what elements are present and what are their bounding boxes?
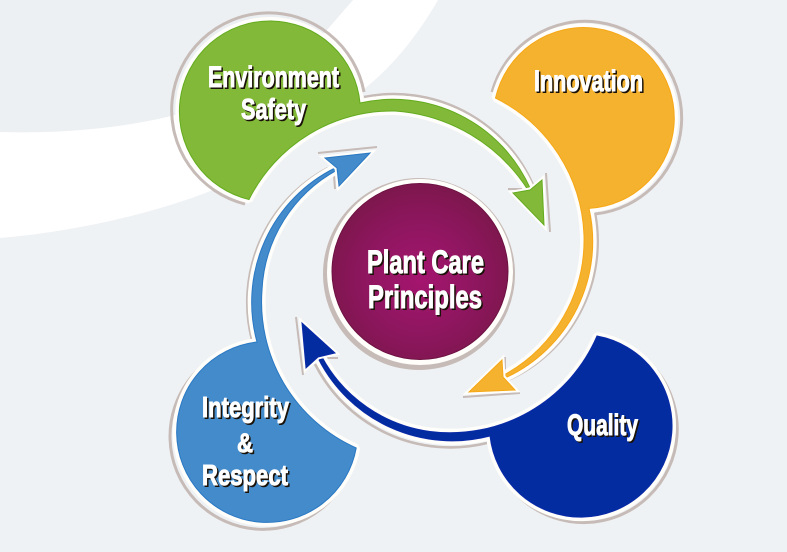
label: environment safety bbox=[208, 61, 341, 128]
central circle rim bbox=[323, 178, 515, 370]
navy arrowhead bbox=[302, 323, 335, 368]
blue outer rim bbox=[170, 147, 377, 529]
label: plant care principles: Plant Care bbox=[368, 246, 486, 282]
label: plant care principles: Principles bbox=[368, 279, 482, 315]
green swoosh shape bbox=[179, 21, 530, 199]
label: integrity and respect: & bbox=[238, 430, 254, 460]
label: quality bbox=[567, 409, 640, 444]
label: environment safety: Safety bbox=[241, 94, 306, 126]
label: plant care principles bbox=[367, 244, 486, 316]
orange outer rim bbox=[463, 21, 682, 397]
panel: quality bbox=[296, 317, 677, 523]
label: integrity and respect: Integrity bbox=[204, 394, 290, 426]
label: plant care principles: Principles bbox=[370, 280, 484, 316]
blue arrowhead bbox=[325, 153, 370, 186]
label: integrity and respect bbox=[202, 392, 290, 494]
green arrowhead bbox=[513, 180, 544, 225]
navy swoosh shape bbox=[318, 336, 672, 517]
green outer rim bbox=[172, 13, 550, 232]
label: quality: Quality bbox=[567, 409, 638, 442]
label: integrity and respect: Respect bbox=[204, 462, 290, 494]
label: innovation: Innovation bbox=[536, 66, 644, 100]
label: integrity and respect: Respect bbox=[202, 460, 288, 492]
label: environment safety: Environment bbox=[210, 62, 341, 96]
central circle halo bbox=[327, 179, 513, 365]
navy outer rim bbox=[296, 317, 677, 523]
label: integrity and respect: & bbox=[237, 428, 253, 458]
label: innovation: Innovation bbox=[534, 65, 643, 98]
blue swoosh shape bbox=[177, 168, 356, 522]
panel: innovation bbox=[463, 21, 682, 397]
panel: central circle bbox=[323, 178, 515, 370]
label: environment safety: Safety bbox=[242, 96, 308, 128]
orange arrowhead bbox=[469, 360, 515, 392]
label: plant care principles: Plant Care bbox=[367, 244, 484, 280]
central circle disc bbox=[332, 184, 508, 360]
orange swoosh shape bbox=[496, 28, 674, 378]
label: quality: Quality bbox=[568, 410, 640, 444]
panel: integrity and respect bbox=[170, 147, 377, 529]
label: environment safety: Environment bbox=[208, 61, 339, 94]
label: integrity and respect: Integrity bbox=[202, 392, 289, 424]
panel: environment safety bbox=[172, 13, 550, 232]
